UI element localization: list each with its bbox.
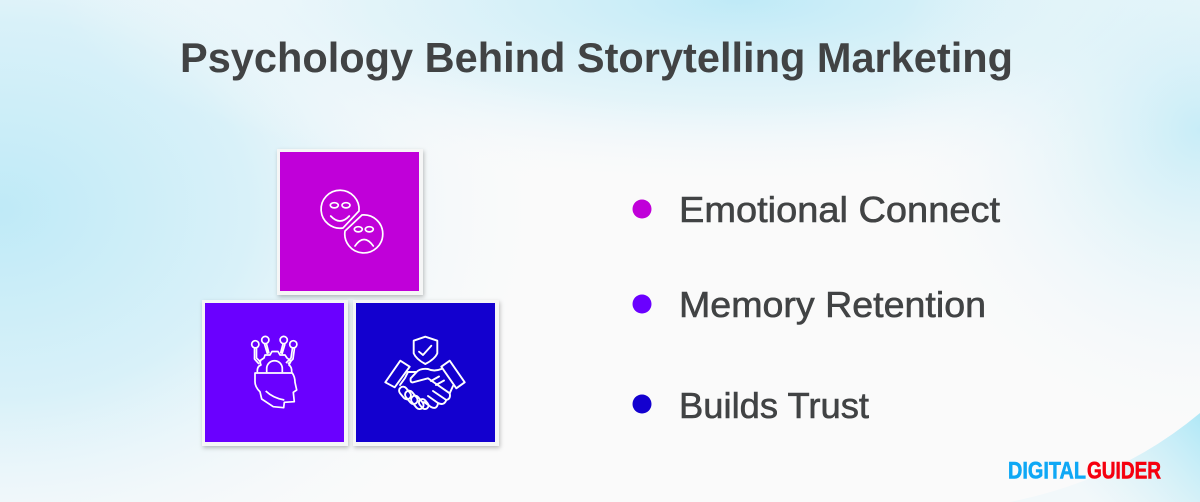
panel: builds trust tile: [353, 300, 499, 446]
logo: digitalguider: DIGITAL: [1008, 458, 1086, 484]
list item: builds trust: Builds Trust: [679, 385, 869, 426]
list item: emotional connect: Emotional Connect: [679, 189, 1000, 230]
logo: digitalguider: GUIDER: [1087, 458, 1161, 484]
list item: memory retention: Memory Retention: [679, 284, 986, 325]
panel: emotional connect tile: [277, 149, 423, 295]
panel: memory retention tile: [202, 300, 348, 446]
icon: happy and sad faces: [321, 190, 383, 253]
icon: head with gear and nodes: [252, 336, 297, 408]
title: Psychology Behind Storytelling Marketing: [180, 34, 1013, 81]
logo: digitalguider: [1008, 458, 1161, 484]
icon: shield and handshake: [385, 337, 465, 411]
